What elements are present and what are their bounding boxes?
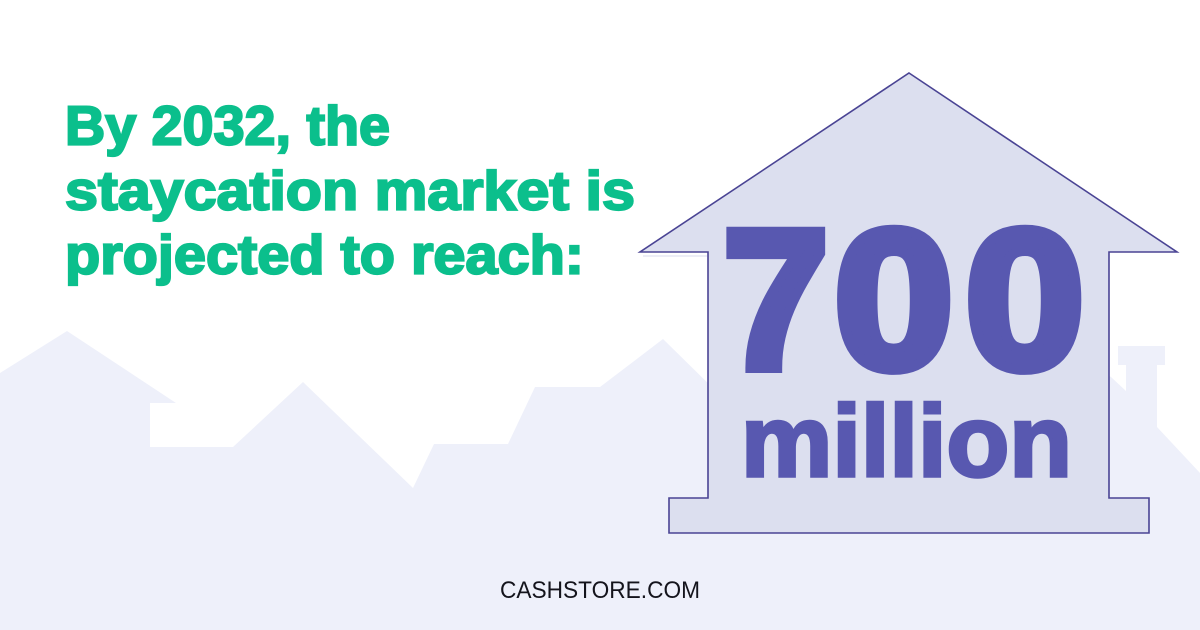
big number 700	[723, 189, 1085, 411]
big number 700: 0	[834, 189, 954, 410]
footer brand: CASHSTORE.COM	[500, 577, 700, 604]
heading: market projection	[65, 94, 635, 286]
big number 700: 0	[965, 189, 1085, 410]
heading: market projection: projected to reach:	[65, 224, 584, 286]
house with 700 million figure	[640, 73, 1177, 533]
big number 700: 7	[723, 189, 829, 411]
house shadow	[643, 255, 707, 257]
heading: market projection: By 2032, the	[65, 94, 390, 156]
heading: market projection: staycation market is	[65, 160, 635, 222]
unit: million: million	[741, 386, 1072, 498]
background skyline silhouette	[0, 331, 1200, 630]
house outline	[640, 73, 1177, 533]
